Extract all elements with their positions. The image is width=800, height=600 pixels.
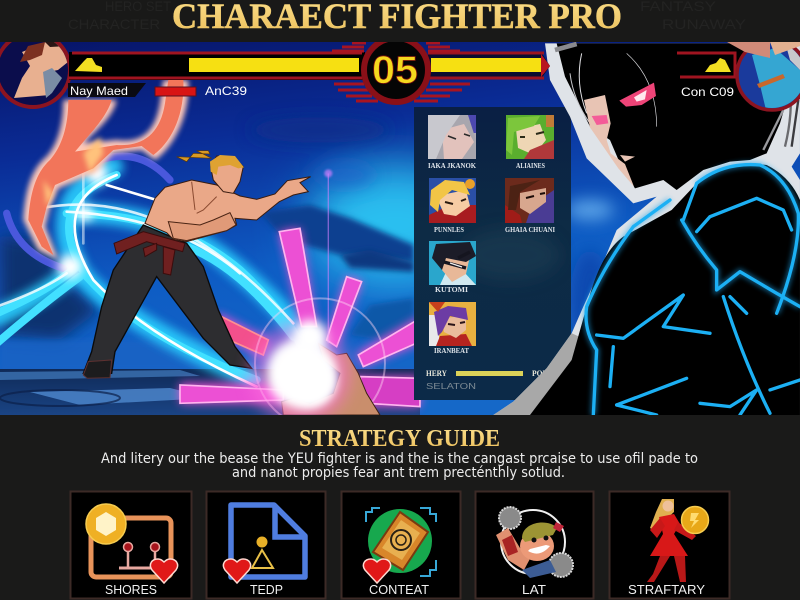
faint left header text: CHARACTER <box>68 16 160 32</box>
left player HUD <box>0 33 365 107</box>
right player HUD <box>677 40 800 110</box>
card: shores <box>70 492 192 598</box>
card: lat <box>476 492 594 598</box>
right eye <box>619 83 656 107</box>
fighter shoes <box>83 360 112 378</box>
foreground hand <box>282 343 380 415</box>
label: player two name: Con C09 <box>681 85 734 99</box>
icon: controller screen <box>86 504 178 583</box>
game scene <box>0 42 800 428</box>
head <box>557 43 790 190</box>
portrait: green hair <box>506 115 554 159</box>
label: meter code: AnC39 <box>205 84 247 98</box>
right portrait <box>727 40 800 110</box>
card: straftary <box>610 492 730 598</box>
fighter head <box>211 156 243 193</box>
dark silhouette character <box>493 43 800 415</box>
sky glow <box>305 165 485 285</box>
flame <box>23 80 188 260</box>
pink energy rays <box>180 169 420 428</box>
label: shores: SHORES <box>105 582 157 597</box>
strategy guide section <box>101 426 698 481</box>
label: lat: LAT <box>522 582 546 597</box>
card: tedp <box>206 492 326 598</box>
neon lines <box>586 165 800 415</box>
face skin <box>584 95 634 187</box>
fighter torso and arms <box>145 177 311 242</box>
portrait: silver hair <box>428 115 476 159</box>
label: tedp: TEDP <box>250 582 283 597</box>
label: portrait 6: IRANBEAT <box>434 347 469 355</box>
silver hair <box>555 44 798 150</box>
strategy description: and nanot propies fear ant trem precténthly sotlud. <box>232 465 565 481</box>
mountains <box>0 202 414 344</box>
special meter <box>155 87 196 96</box>
panel smoke texture <box>460 229 560 281</box>
stat bar row: HERY <box>426 369 447 378</box>
label: portrait 3: PUNNLES <box>434 226 464 234</box>
strategy description: And litery our the bease the YEU fighter is and the is the cangast prcaise to use ofil pade to <box>101 451 698 467</box>
faint left header text <box>68 0 171 32</box>
label: portrait 2: ALIAINES <box>516 162 545 170</box>
energy blast <box>250 320 350 423</box>
left portrait <box>0 42 71 109</box>
icon: cartoon brawler <box>496 507 573 578</box>
stat bar row: POW <box>532 369 550 378</box>
left rank icon <box>75 58 102 72</box>
round timer <box>332 38 470 102</box>
ground <box>0 369 420 415</box>
strategy heading: STRATEGY GUIDE <box>299 426 500 452</box>
label: conteat: CONTEAT <box>369 582 429 597</box>
white outline <box>493 43 800 415</box>
character select panel <box>414 107 571 400</box>
right rank icon <box>705 58 731 72</box>
label: portrait 4: GHAIA CHUANI <box>505 226 555 234</box>
left health bar <box>68 52 365 80</box>
fighter pants <box>83 225 252 373</box>
right health bar <box>428 52 550 79</box>
left eye <box>592 115 608 125</box>
mouth <box>620 155 635 162</box>
right bar frame <box>677 53 735 77</box>
label: straftary: STRAFTARY <box>628 582 705 597</box>
portrait: purple hair <box>429 302 476 346</box>
portrait: blonde hair <box>429 178 476 223</box>
stat bar row <box>426 369 550 378</box>
faint right header text <box>640 0 747 32</box>
clouds <box>266 121 620 334</box>
portrait: dark hair <box>429 241 476 285</box>
sky background <box>0 42 800 415</box>
icon: document <box>223 505 305 583</box>
label: portrait 5: KUTOMI <box>435 286 468 294</box>
header bar <box>0 0 800 42</box>
strategy description <box>101 451 698 481</box>
fighter belt <box>114 232 185 275</box>
fighter character <box>83 151 311 378</box>
portrait: brown hair <box>505 178 554 223</box>
icon: woman in red with coin <box>647 499 708 582</box>
timer number: 05 <box>372 49 418 92</box>
label: selection: SELATON <box>426 382 476 391</box>
label: player one name: Nay Maed <box>70 84 128 98</box>
label: portrait 1: IAKA JKANOK <box>428 162 477 170</box>
icon: scroll emblem <box>363 508 436 583</box>
faint right header text: RUNAWAY <box>662 16 747 32</box>
timer wings <box>332 43 470 101</box>
card: conteat <box>342 492 460 598</box>
label: player one name <box>68 83 146 98</box>
torso <box>530 165 800 415</box>
grey lower band <box>493 333 587 415</box>
neon glow <box>586 165 800 415</box>
energy swirls <box>0 156 307 387</box>
